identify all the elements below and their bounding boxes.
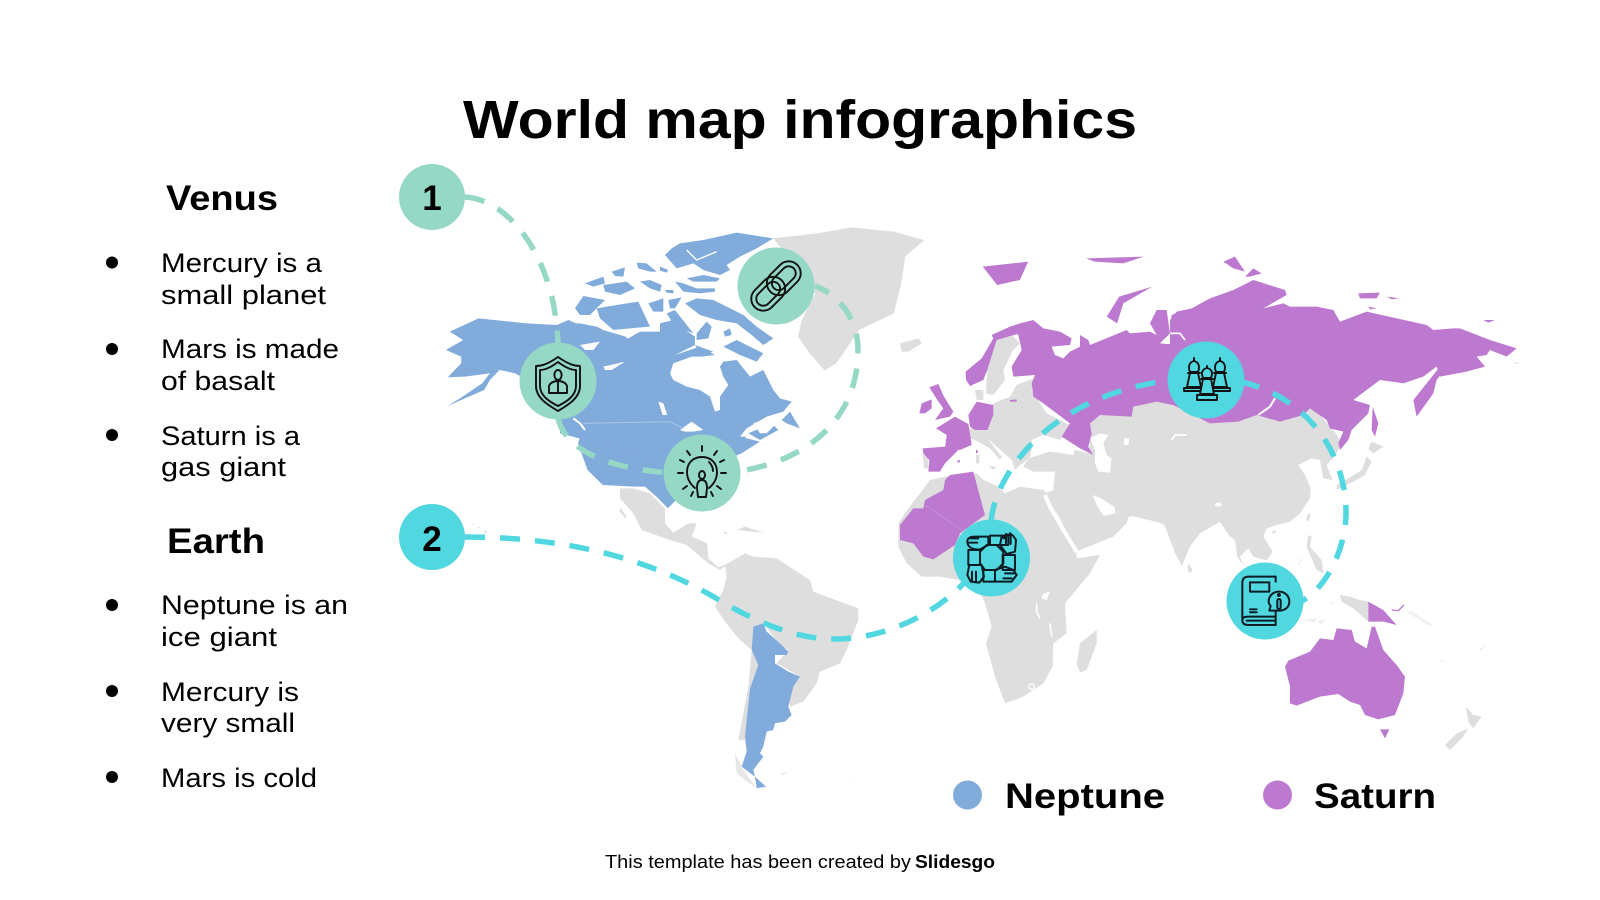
- bullet item: Neptune ice giant: ice giant: [161, 622, 278, 652]
- bullet item: Mercury very small: [106, 677, 299, 738]
- purple countries: North-West Africa: [900, 472, 985, 559]
- icon: light bulb with person: [664, 434, 740, 512]
- seas and lakes in Eurasia and Africa: [1029, 433, 1222, 689]
- bullet item: Mercury small planet: [106, 248, 327, 310]
- icon: chain link: [738, 248, 814, 324]
- legend: Neptune: Neptune: [1005, 777, 1165, 816]
- purple countries: Australia and Papua: [1285, 602, 1405, 738]
- world map: [446, 227, 1522, 788]
- white lakes of Canada and borders: [573, 250, 777, 433]
- bullet item: Saturn gas giant: Saturn is a: [161, 421, 301, 451]
- bullet item: Saturn gas giant: gas giant: [161, 452, 287, 482]
- purple countries: Russia and Europe: [919, 257, 1517, 472]
- bullet item: Mars cold: Mars is cold: [161, 763, 317, 793]
- icon: chess pieces: [1168, 342, 1244, 418]
- blue countries: North America: [446, 233, 800, 508]
- icon: shield with person: [520, 342, 596, 420]
- bullet item: Mercury small planet: Mercury is a: [161, 248, 323, 278]
- dashed route: green, from 1 to shield: [465, 197, 558, 345]
- bullet item: Mercury very small: Mercury is: [161, 677, 299, 707]
- footer credit: Slidesgo: [915, 852, 995, 872]
- panel: Venus list: [106, 179, 339, 482]
- dashed route: cyan, from 2 to hands: [465, 537, 975, 639]
- legend: Neptune: [953, 777, 1165, 816]
- dashed route: green, shield through bulb to chain: [558, 286, 858, 474]
- title: World map infographics: [463, 90, 1137, 150]
- heading: Venus: Venus: [166, 179, 278, 218]
- number badge 1: [399, 164, 465, 230]
- bullet item: Mars basalt: Mars is made: [161, 334, 339, 364]
- number badge 2: 2: [422, 520, 442, 559]
- heading: Earth: Earth: [167, 522, 265, 561]
- blue countries: South America: [742, 623, 800, 788]
- icon: book with info bubble: [1226, 562, 1304, 640]
- icon: four joined hands: [953, 520, 1030, 596]
- grey landmasses: [473, 227, 1522, 788]
- bullet item: Mercury very small: very small: [161, 708, 295, 738]
- footer credit: This template has been created by: [605, 852, 911, 872]
- panel: Earth list: [106, 522, 348, 793]
- bullet item: Neptune ice giant: [106, 590, 348, 652]
- bullet item: Mars basalt: [106, 334, 339, 396]
- legend: Saturn: [1263, 777, 1436, 816]
- bullet item: Neptune ice giant: Neptune is an: [161, 590, 348, 620]
- number badge 1: 1: [422, 179, 442, 218]
- bullet item: Mars cold: [106, 763, 317, 793]
- dashed route: cyan, hands through chess to book: [991, 378, 1346, 602]
- legend: Saturn: Saturn: [1314, 777, 1436, 816]
- number badge 2: [399, 504, 465, 570]
- bullet item: Mars basalt: of basalt: [161, 366, 276, 396]
- bullet item: Mercury small planet: small planet: [161, 280, 327, 310]
- bullet item: Saturn gas giant: [106, 421, 301, 482]
